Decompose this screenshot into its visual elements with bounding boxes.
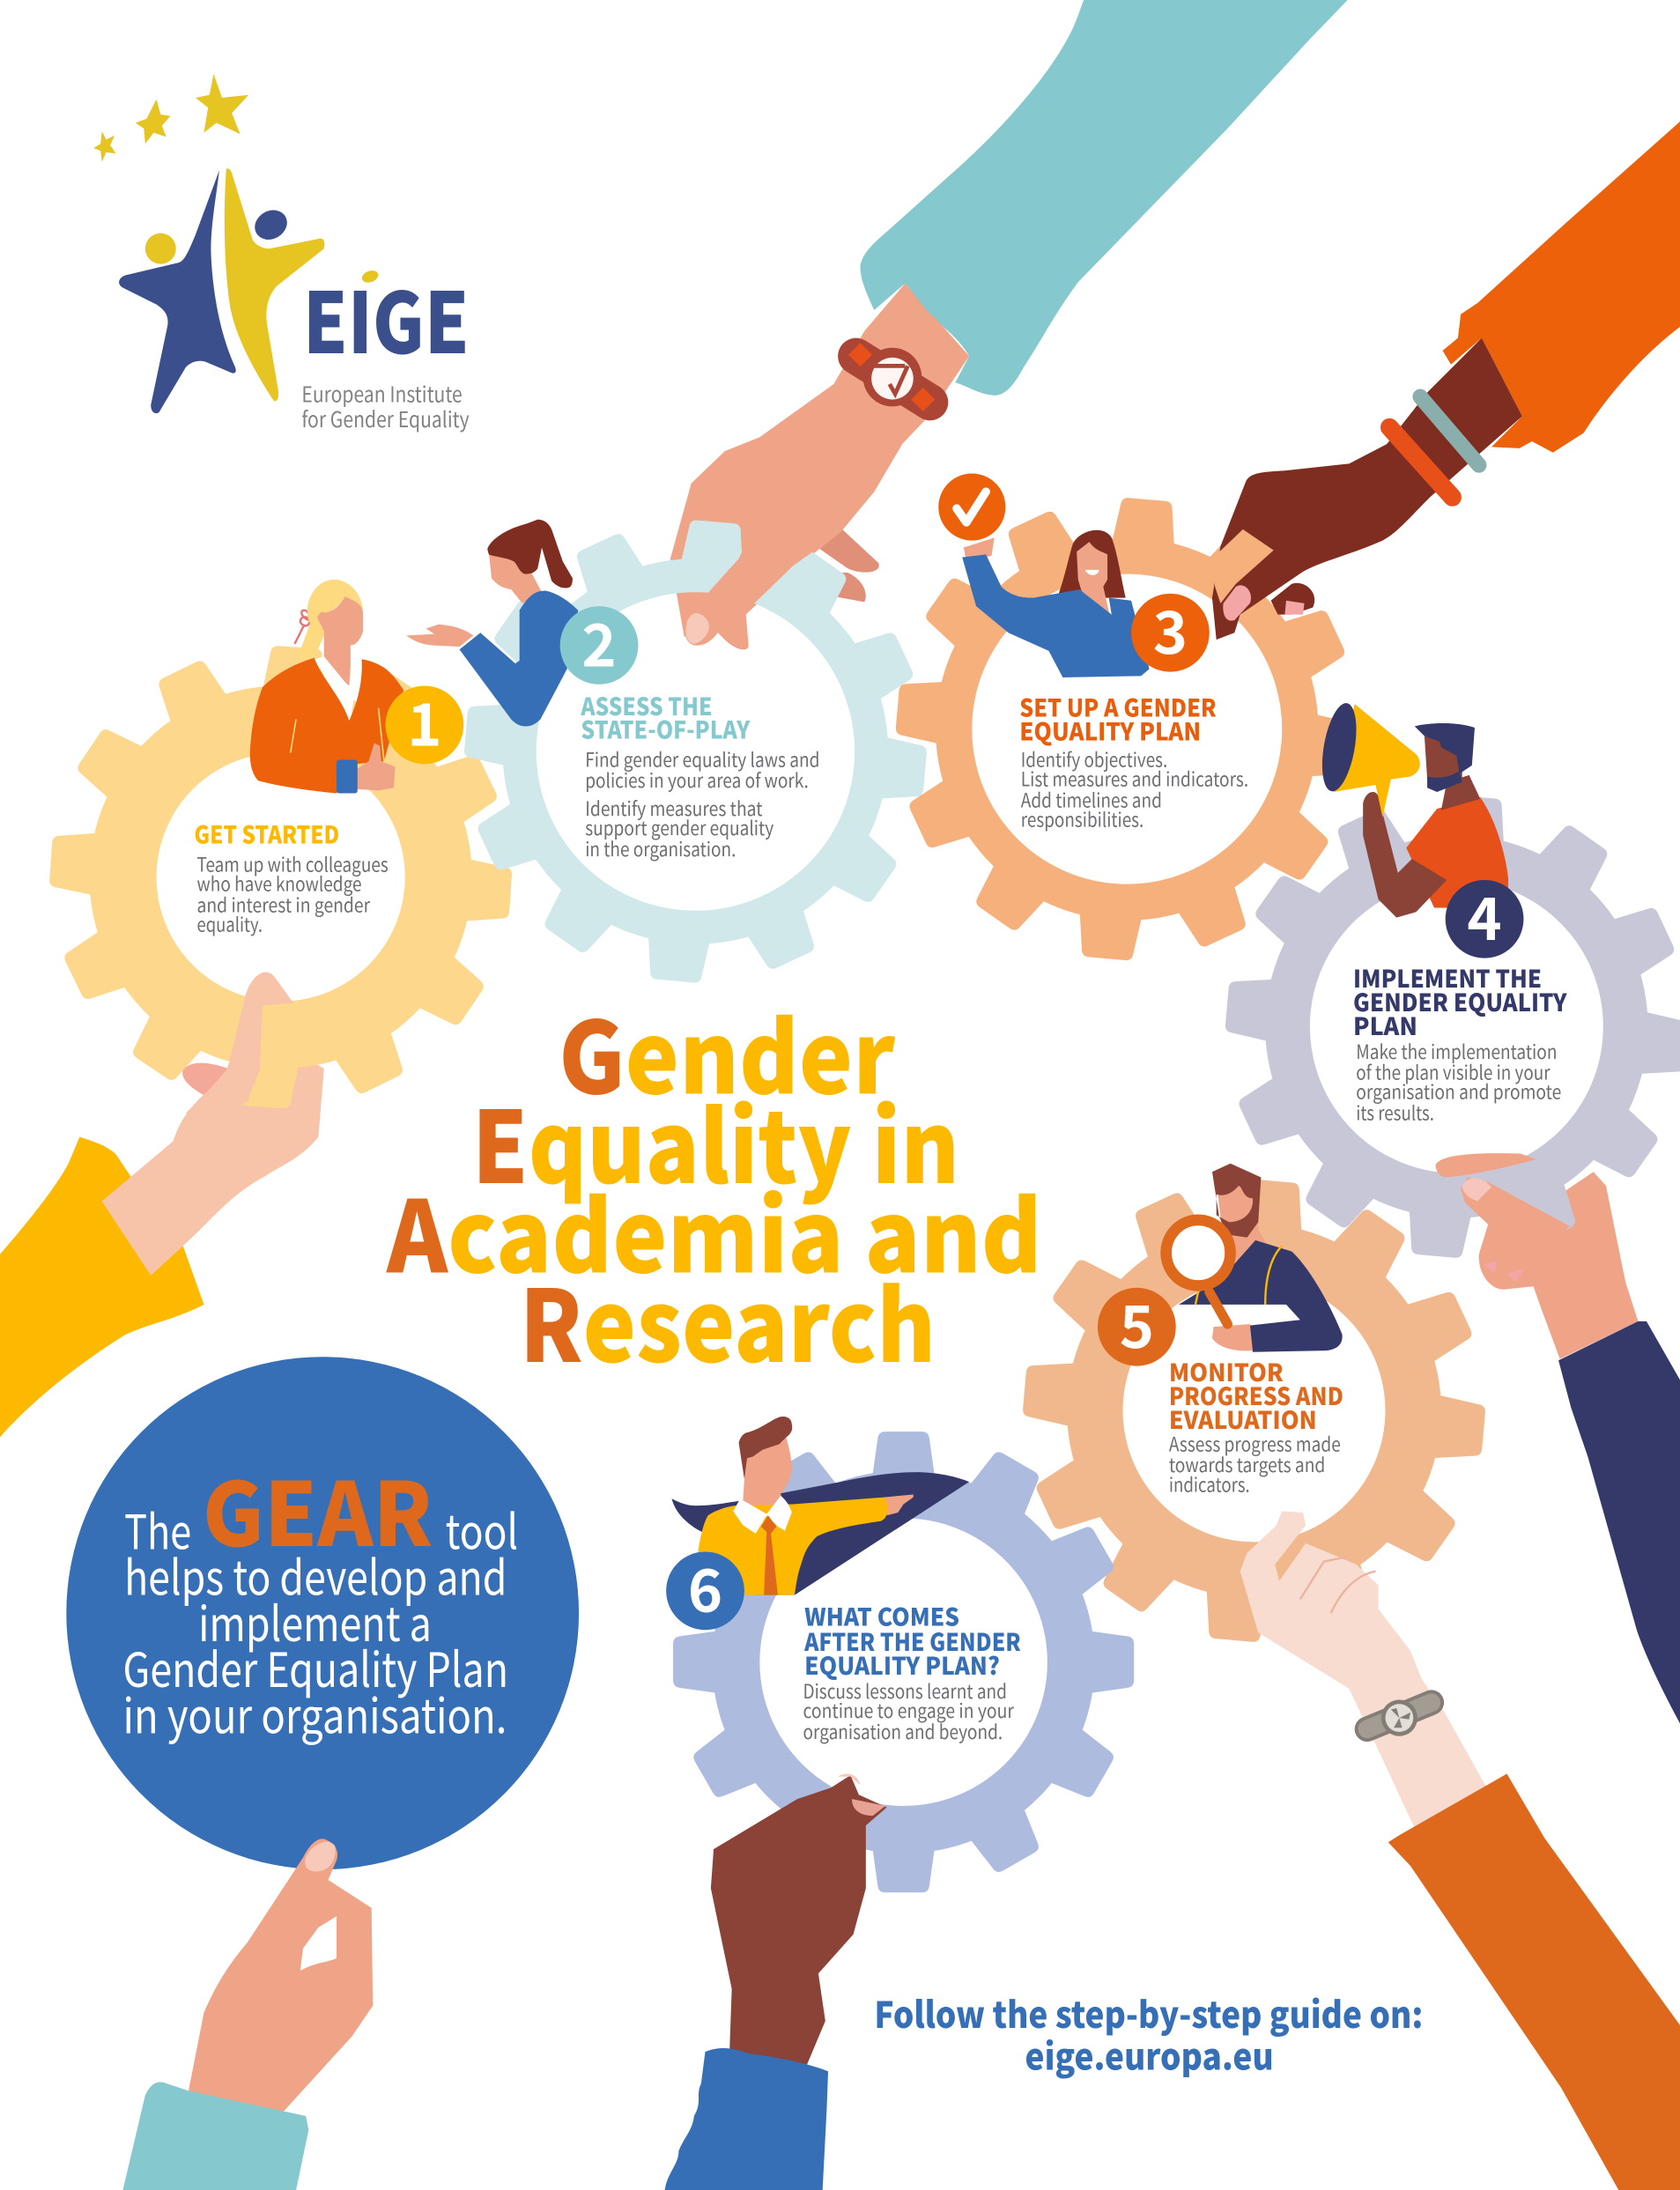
body xyxy=(197,849,389,938)
heading: GENDER EQUALITY xyxy=(1353,983,1568,1018)
nail xyxy=(685,613,709,644)
badge 1: 1 xyxy=(407,679,442,764)
logo caption xyxy=(301,378,470,434)
figure 6: man pointing with cape xyxy=(671,1417,969,1595)
jacket xyxy=(699,1498,888,1595)
body: and interest in gender xyxy=(197,890,370,918)
heading: GET STARTED xyxy=(194,816,339,851)
hand 2 back (behind gear 2) xyxy=(670,284,969,637)
body: Add timelines and xyxy=(1021,785,1162,813)
thumb hand xyxy=(356,743,396,790)
badge 6 xyxy=(666,1545,744,1630)
watch xyxy=(848,343,935,411)
logo caption: for Gender Equality xyxy=(301,403,470,434)
hand xyxy=(1212,1324,1253,1350)
body: in the organisation. xyxy=(585,834,736,862)
figure 5: man with magnifier xyxy=(1166,1164,1343,1352)
body: who have knowledge xyxy=(197,869,362,898)
orange sleeve xyxy=(1388,1774,1680,2190)
text: The GEAR tool: The xyxy=(124,1493,191,1563)
orange sleeve xyxy=(1443,122,1680,453)
heading: MONITOR xyxy=(1169,1353,1284,1388)
hand 5 with watch and sleeve xyxy=(1240,1511,1680,2190)
gear tooth over hand xyxy=(1212,529,1274,603)
step 3 text xyxy=(1019,688,1248,833)
heading xyxy=(1353,959,1568,1042)
heading: IMPLEMENT THE xyxy=(1353,959,1542,995)
face xyxy=(1217,1181,1268,1264)
suit xyxy=(1179,1240,1343,1352)
icon: megaphone xyxy=(1316,700,1420,817)
hair xyxy=(1057,530,1126,598)
body: equality. xyxy=(197,909,263,938)
icon: yellow figure xyxy=(225,168,324,401)
body: indicators. xyxy=(1169,1469,1250,1498)
badge 2: 2 xyxy=(581,599,617,684)
arm and hand xyxy=(1212,338,1522,640)
neck xyxy=(1441,775,1480,810)
ribbon xyxy=(294,610,312,644)
teal sleeve xyxy=(860,0,1348,396)
bracelet teal xyxy=(1420,396,1479,465)
body xyxy=(1021,744,1248,833)
gear 6: periwinkle xyxy=(673,1432,1134,1892)
step 4 text xyxy=(1353,959,1568,1127)
title xyxy=(386,979,1042,1391)
logo: EIGE xyxy=(93,74,470,434)
icon: magnifier xyxy=(1166,1220,1231,1324)
logo wordmark: EIGE xyxy=(303,257,470,378)
icon: heads xyxy=(140,204,380,285)
figure 4: man with megaphone xyxy=(1316,700,1508,918)
call to action xyxy=(874,1986,1423,2081)
hand 1 palm and sleeve xyxy=(0,1033,324,1437)
body: support gender equality xyxy=(585,813,774,841)
ponytail xyxy=(298,620,325,659)
hand holding gear 6 with blue sleeve xyxy=(665,1774,887,2190)
gear 1: yellow xyxy=(34,631,527,1123)
call to action: eige.europa.eu xyxy=(1025,2028,1274,2081)
jacket highlights xyxy=(291,708,384,761)
heading xyxy=(1169,1353,1343,1436)
nail xyxy=(1223,585,1251,621)
heading: EVALUATION xyxy=(1169,1401,1317,1436)
heading: SET UP A GENDER xyxy=(1019,688,1217,723)
arm xyxy=(1363,792,1447,918)
cap xyxy=(1415,723,1475,773)
text: description: helps to develop and xyxy=(124,1540,507,1609)
hand 2: sleeve, finger and watch xyxy=(685,0,1348,649)
badge 2 xyxy=(560,599,638,684)
body: Make the implementation xyxy=(1356,1037,1558,1065)
body: Assess progress made xyxy=(1169,1429,1341,1457)
badge 5: 5 xyxy=(1120,1281,1154,1365)
blue top xyxy=(962,554,1150,677)
body: of the plan visible in your xyxy=(1356,1058,1550,1086)
tie xyxy=(761,1515,778,1595)
body: continue to engage in your xyxy=(803,1696,1014,1724)
gear 4: grey lilac xyxy=(1207,777,1680,1276)
heading: EQUALITY PLAN? xyxy=(804,1646,1000,1682)
title: Equality in xyxy=(472,1069,959,1212)
body: policies in your area of work. xyxy=(585,766,809,794)
hand xyxy=(884,1494,914,1515)
text: The GEAR tool: GEAR xyxy=(203,1444,433,1572)
hand xyxy=(406,625,473,647)
index finger over gear xyxy=(685,444,902,649)
title: Gender xyxy=(559,979,896,1122)
collar xyxy=(315,648,363,721)
beard xyxy=(1427,771,1462,792)
badge 4: 4 xyxy=(1467,873,1502,958)
gear 2: pale teal xyxy=(446,502,945,1001)
heading: AFTER THE GENDER xyxy=(803,1623,1021,1658)
gear 5: tan xyxy=(1004,1161,1504,1661)
face and neck xyxy=(317,596,363,687)
gear 3: peach xyxy=(877,479,1377,979)
face and neck xyxy=(489,551,542,603)
figure 3: woman with check xyxy=(938,473,1150,677)
body xyxy=(803,1676,1014,1745)
text: The GEAR tool xyxy=(124,1444,518,1572)
step 5 text xyxy=(1169,1353,1343,1498)
figure 2: woman presenting xyxy=(406,520,578,726)
jacket xyxy=(250,658,403,794)
bracelet orange xyxy=(1389,427,1453,497)
icon: check badge xyxy=(938,473,1005,541)
body xyxy=(1356,1037,1561,1127)
heading: PLAN xyxy=(1353,1007,1417,1042)
text: description: Gender Equality Plan xyxy=(122,1631,508,1701)
badge 1 xyxy=(386,679,463,764)
badge 3: 3 xyxy=(1153,587,1188,671)
body: towards targets and xyxy=(1169,1450,1325,1478)
cape xyxy=(671,1472,969,1595)
heading: PROGRESS AND xyxy=(1169,1377,1343,1412)
heading: WHAT COMES xyxy=(804,1597,959,1632)
blue top xyxy=(460,591,578,726)
body: Find gender equality laws and xyxy=(585,744,820,773)
heading: ASSESS THE xyxy=(581,687,712,722)
shirt xyxy=(1406,797,1508,908)
hand 4 back (behind gear 4) xyxy=(1479,1172,1638,1359)
body xyxy=(585,744,820,862)
hair xyxy=(307,580,363,632)
body: List measures and indicators. xyxy=(1021,765,1248,793)
face xyxy=(1077,542,1110,618)
icon: blue figure xyxy=(119,170,236,413)
text: description: in your organisation. xyxy=(122,1678,507,1748)
body: Discuss lessons learnt and xyxy=(803,1676,1007,1705)
title: Research xyxy=(520,1247,936,1391)
hand 3: dark hand with bracelets xyxy=(1212,122,1680,640)
head xyxy=(740,1437,792,1515)
step 6 text xyxy=(803,1597,1021,1745)
hand holding circle with teal sleeve xyxy=(122,1839,373,2190)
text: description xyxy=(122,1540,508,1748)
body: Identify objectives. xyxy=(1021,744,1167,773)
step 2 text xyxy=(581,687,820,862)
body: Identify measures that xyxy=(585,794,763,822)
body: organisation and beyond. xyxy=(803,1717,1003,1745)
heading xyxy=(1019,688,1217,747)
hand 1 thumb over gear xyxy=(186,972,293,1114)
heading: STATE-OF-PLAY xyxy=(581,711,751,746)
circle: GEAR tool xyxy=(66,1357,579,1869)
watch xyxy=(1367,1700,1432,1736)
text: description: implement a xyxy=(198,1586,432,1655)
body: Team up with colleagues xyxy=(197,849,389,877)
cuff xyxy=(337,759,358,794)
small fingers xyxy=(1271,583,1314,615)
text: The GEAR tool: tool xyxy=(446,1493,518,1563)
badge 6: 6 xyxy=(688,1545,722,1630)
badge 5 xyxy=(1098,1281,1176,1366)
body: responsibilities. xyxy=(1021,805,1143,833)
step 1 text xyxy=(194,816,389,938)
body: organisation and promote xyxy=(1356,1077,1561,1106)
heading: EQUALITY PLAN xyxy=(1019,712,1201,747)
hand 4 fingers and navy sleeve xyxy=(1436,1153,1680,1723)
badge 3 xyxy=(1131,587,1210,672)
head xyxy=(1425,736,1462,780)
hair xyxy=(739,1417,792,1479)
body xyxy=(1169,1429,1341,1498)
badge 4 xyxy=(1446,873,1523,958)
hand xyxy=(964,537,995,561)
collar xyxy=(733,1496,792,1534)
title: Academia and xyxy=(386,1158,1042,1301)
icon: three stars xyxy=(93,74,248,162)
hair xyxy=(487,520,573,588)
hair and beard xyxy=(1212,1164,1261,1238)
heading xyxy=(803,1597,1021,1682)
call to action: Follow the step-by-step guide on: xyxy=(874,1986,1423,2038)
body: its results. xyxy=(1356,1099,1434,1127)
figure 1: woman with thumbs up xyxy=(250,580,403,794)
logo caption: European Institute xyxy=(301,378,463,410)
heading xyxy=(581,687,751,746)
